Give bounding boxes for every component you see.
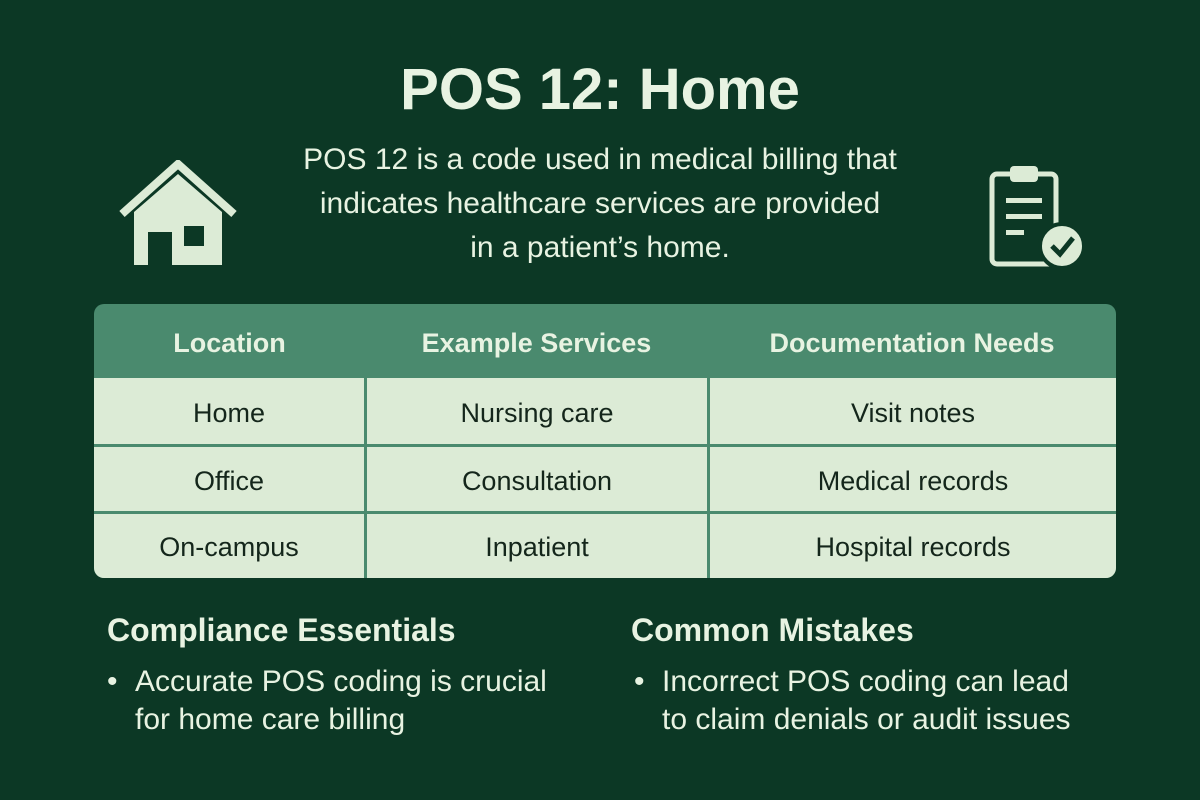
header: Example Services: Example Services bbox=[422, 328, 651, 358]
table: Home bbox=[193, 398, 265, 428]
heading: Compliance Essentials: Compliance Essentials bbox=[107, 612, 456, 648]
title: POS 12: Home bbox=[400, 57, 800, 122]
bullet: mistakes: to claim denials or audit issues bbox=[662, 703, 1071, 736]
table: Hospital records bbox=[815, 532, 1011, 562]
description text: indicates healthcare services are provided bbox=[320, 187, 880, 220]
bullet: mistakes: Incorrect POS coding can lead bbox=[662, 665, 1069, 698]
table: Office bbox=[194, 466, 264, 496]
icon: house bbox=[119, 160, 237, 265]
bullet: compliance: for home care billing bbox=[135, 703, 405, 736]
table bbox=[94, 304, 1116, 578]
bullet: mistakes bbox=[634, 663, 1114, 739]
icon: clipboard with check bbox=[990, 166, 1082, 266]
header: Location: Location bbox=[173, 328, 286, 358]
heading: Common Mistakes: Common Mistakes bbox=[631, 612, 914, 648]
description text: in a patient’s home. bbox=[470, 231, 730, 264]
table: Nursing care bbox=[460, 398, 614, 428]
description text bbox=[303, 143, 897, 264]
header: Documentation Needs: Documentation Needs bbox=[769, 328, 1055, 358]
description text: POS 12 is a code used in medical billing that bbox=[303, 143, 897, 176]
bullet: compliance bbox=[107, 663, 577, 739]
table: Visit notes bbox=[851, 398, 975, 428]
table: Medical records bbox=[818, 466, 1008, 496]
table: Consultation bbox=[462, 466, 612, 496]
table: On-campus bbox=[159, 532, 299, 562]
bullet: compliance: Accurate POS coding is crucial bbox=[135, 665, 547, 698]
table: Inpatient bbox=[485, 532, 589, 562]
